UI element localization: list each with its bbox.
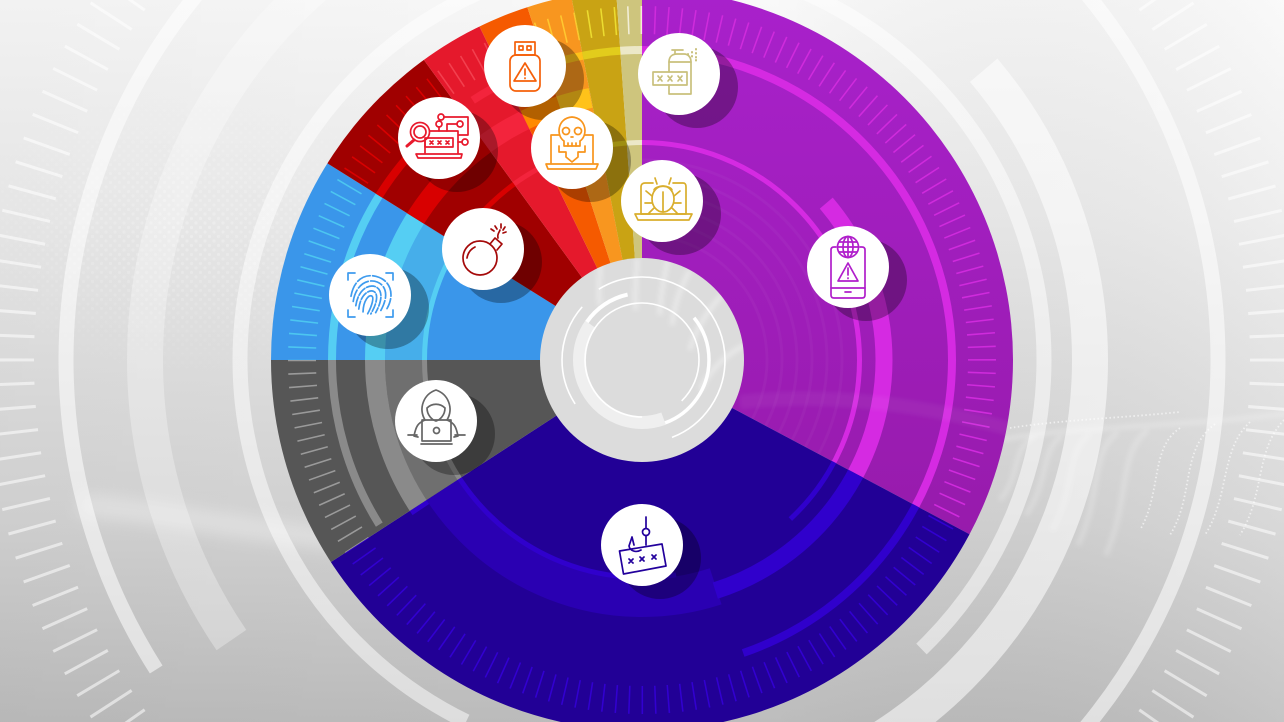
wedge: grey	[271, 360, 556, 562]
wedge: light orange	[527, 0, 622, 263]
icon: laptop password search	[398, 97, 480, 179]
icon: skull over laptop	[531, 107, 613, 189]
central hub	[540, 258, 745, 462]
icon shadows	[347, 38, 907, 599]
icon: fingerprint	[329, 254, 411, 336]
icon: phone with globe and warning	[807, 226, 889, 308]
icon: hooded hacker	[395, 380, 477, 462]
icon: bug on laptop	[621, 160, 703, 242]
icon: password spray can	[638, 33, 720, 115]
wedge: purple	[642, 0, 1013, 534]
icon: phishing hook on password	[601, 504, 683, 586]
wedge: khaki	[616, 0, 642, 258]
wedge: orange	[480, 7, 610, 268]
icon: infected USB drive	[484, 25, 566, 107]
icon: bomb	[442, 208, 524, 290]
ripple texture	[1000, 412, 1284, 555]
wheel of threat wedges	[250, 0, 1050, 722]
wedge: dark red	[327, 60, 582, 306]
wedge: blue	[271, 164, 556, 360]
wedge: red	[424, 26, 598, 278]
wedge: gold	[572, 0, 635, 260]
wedge: indigo	[330, 408, 970, 722]
